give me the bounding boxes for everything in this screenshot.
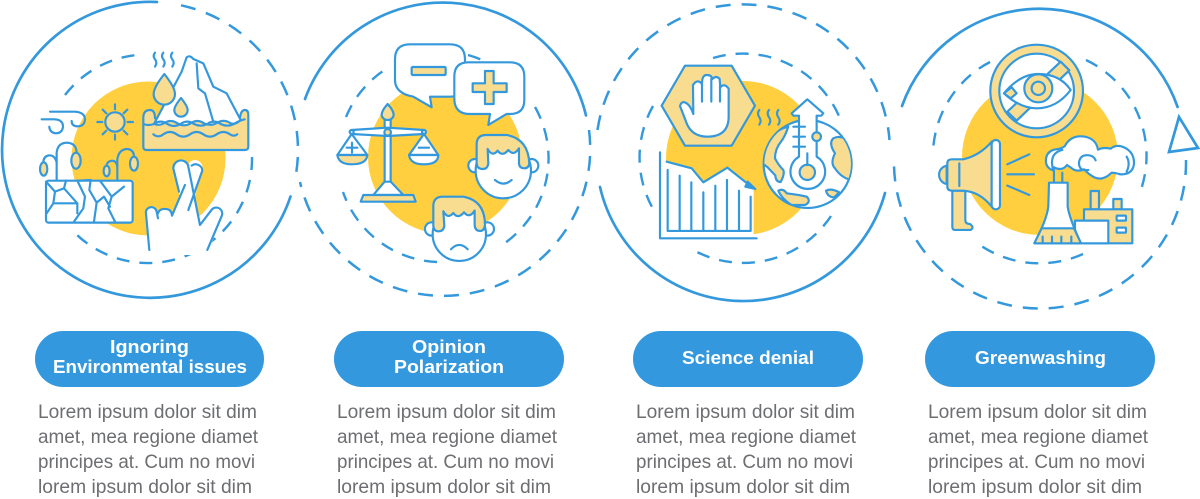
icon: sad face <box>425 197 494 261</box>
text block 1: amet, mea regione diamet <box>38 426 259 448</box>
text block 3 <box>636 401 857 498</box>
label pill: opinion polarization: Polarization <box>394 356 504 377</box>
panel: opinion polarization <box>300 3 590 296</box>
icon: declining bar chart <box>660 152 757 238</box>
text block 1 <box>38 401 259 498</box>
icon: heat waves <box>758 110 780 125</box>
panel: greenwashing <box>894 9 1198 308</box>
text block 4: amet, mea regione diamet <box>928 426 1149 448</box>
text block 3: lorem ipsum dolor sit dim <box>636 476 850 498</box>
outer ring <box>598 4 890 301</box>
inner dashed ring <box>65 55 252 263</box>
text block 1: Lorem ipsum dolor sit dim <box>38 401 257 423</box>
text block 2: Lorem ipsum dolor sit dim <box>337 401 556 423</box>
text block 4: principes at. Cum no movi <box>928 451 1145 473</box>
icon: plus speech bubble <box>454 62 524 125</box>
icon: triangle arrowhead <box>1169 117 1198 152</box>
label pill: ignoring environmental issues: Environmental issues <box>53 356 247 377</box>
label pill: opinion polarization <box>334 331 564 387</box>
text block 2: amet, mea regione diamet <box>337 426 558 448</box>
yellow circle backdrop <box>666 81 820 235</box>
outer ring <box>894 9 1186 308</box>
panel: science denial <box>598 4 890 301</box>
inner dashed ring <box>343 55 549 262</box>
text block 2 <box>337 401 558 498</box>
icon: crossed-out eye <box>990 45 1083 137</box>
icon: sun <box>97 104 133 140</box>
text block 3: amet, mea regione diamet <box>636 426 857 448</box>
text block 4: lorem ipsum dolor sit dim <box>928 476 1142 498</box>
inner dashed ring <box>640 54 839 263</box>
icon: megaphone <box>939 140 1034 230</box>
text block 1: lorem ipsum dolor sit dim <box>38 476 252 498</box>
icon: dried plants and cracked soil <box>40 143 138 223</box>
text block 1: principes at. Cum no movi <box>38 451 255 473</box>
label pill: greenwashing: Greenwashing <box>975 347 1106 368</box>
label pill: ignoring environmental issues: Ignoring <box>110 336 189 357</box>
icon: iceberg melting <box>143 53 248 150</box>
yellow circle backdrop <box>962 79 1118 235</box>
icon: stop hand hexagon <box>662 66 755 146</box>
panel: ignoring environmental issues <box>2 2 298 298</box>
outer ring <box>300 3 590 296</box>
icon: crossed fingers hand <box>146 160 222 255</box>
text block 3: principes at. Cum no movi <box>636 451 853 473</box>
text block 2: lorem ipsum dolor sit dim <box>337 476 551 498</box>
icon: globe with thermometer <box>757 99 853 208</box>
text block 4: Lorem ipsum dolor sit dim <box>928 401 1147 423</box>
icon: factory with smoke cloud <box>1034 136 1134 243</box>
icon: balance scale <box>337 104 438 202</box>
label pill: opinion polarization: Opinion <box>412 336 486 357</box>
icon: wind <box>42 112 85 133</box>
icon: smiling face <box>468 135 538 198</box>
text block 3: Lorem ipsum dolor sit dim <box>636 401 855 423</box>
label pill: greenwashing <box>925 331 1155 387</box>
yellow circle backdrop <box>368 80 522 234</box>
label pill: ignoring environmental issues <box>35 331 264 387</box>
label pill: science denial: Science denial <box>682 347 814 368</box>
text block 2: principes at. Cum no movi <box>337 451 554 473</box>
outer ring <box>2 2 298 298</box>
label pill: science denial <box>633 331 863 387</box>
inner dashed ring <box>933 60 1147 263</box>
text block 4 <box>928 401 1149 498</box>
yellow circle backdrop <box>72 82 226 236</box>
icon: minus speech bubble <box>395 44 465 107</box>
